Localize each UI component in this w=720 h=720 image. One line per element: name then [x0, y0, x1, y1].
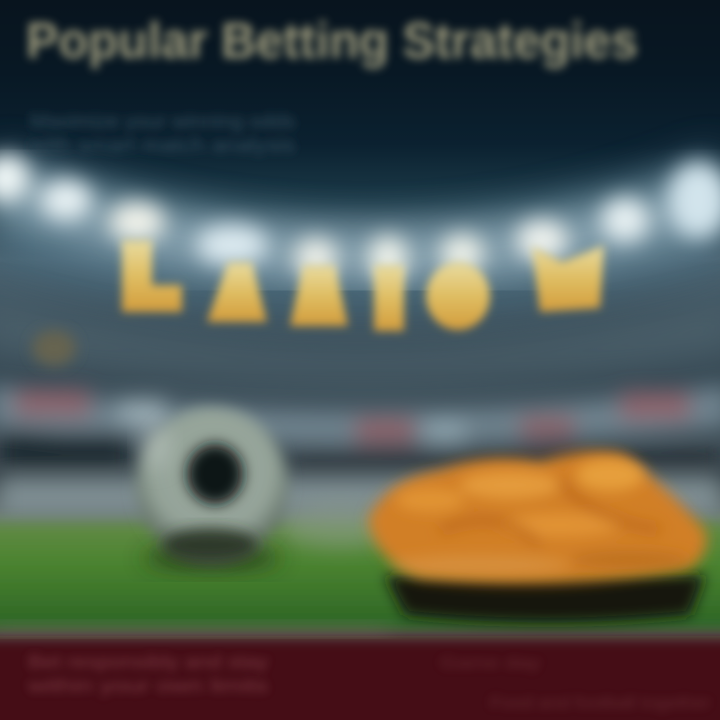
footer text right: Food and football together	[490, 695, 711, 712]
bowl of fried chicken	[368, 451, 707, 622]
bowl	[385, 575, 705, 622]
stadium lights arc	[0, 154, 720, 280]
golden letters	[122, 240, 604, 331]
letter M	[532, 245, 604, 312]
footer text right: Game day	[440, 655, 540, 672]
subtitle text block	[29, 111, 295, 157]
chicken pile	[368, 451, 707, 583]
letter A second	[290, 265, 348, 326]
footer band	[0, 624, 720, 720]
footer text left	[27, 652, 268, 696]
letter L	[122, 240, 182, 312]
footer text left: within your own limits	[27, 676, 268, 696]
chicken texture	[390, 459, 690, 575]
digit 1	[374, 265, 404, 331]
footer text right	[440, 655, 711, 712]
crowd band	[0, 385, 720, 516]
letter A	[207, 262, 267, 322]
title: Popular Betting Strategies	[26, 12, 638, 69]
football pitch	[0, 503, 720, 632]
digit 0	[426, 262, 490, 330]
small gold marker	[32, 330, 76, 366]
subtitle text block: Maximize your winning odds	[30, 111, 295, 133]
football	[136, 407, 288, 570]
subtitle text block: with smart match analysis	[29, 135, 295, 157]
light spots	[0, 154, 720, 280]
glow behind lights	[0, 185, 720, 255]
footer text left: Bet responsibly and stay	[28, 652, 268, 672]
